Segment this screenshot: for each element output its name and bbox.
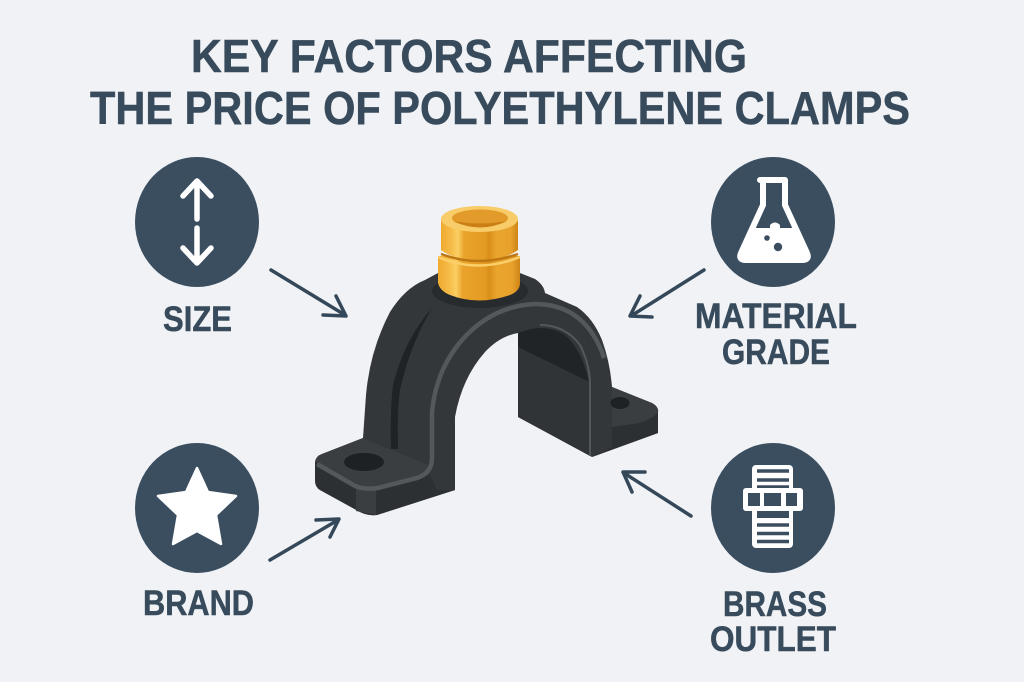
icon: size arrows — [135, 157, 259, 287]
brass outlet — [438, 206, 520, 300]
arrow: brass to clamp — [623, 472, 691, 516]
arrow: brand to clamp — [270, 519, 339, 560]
inner arch rim — [540, 325, 590, 456]
seat shadow — [432, 274, 528, 308]
icon: star — [135, 443, 259, 573]
clamp illustration — [315, 206, 658, 515]
label: brass outlet: OUTLET — [710, 620, 836, 659]
inner arch shadow — [518, 328, 589, 382]
arrow: material to clamp — [630, 270, 704, 317]
inner wall — [518, 347, 592, 457]
clamp body — [315, 273, 658, 515]
right foot side — [592, 412, 658, 457]
label: brass outlet: BRASS — [723, 585, 827, 624]
icon: flask — [711, 157, 835, 287]
arrow: size to clamp — [271, 270, 346, 316]
label: material grade: MATERIAL — [695, 297, 857, 336]
label: material grade — [695, 297, 857, 372]
label: material grade: GRADE — [722, 333, 830, 372]
groove — [391, 308, 432, 449]
icon: brass outlet — [711, 443, 835, 573]
title — [90, 30, 910, 134]
right foot top — [612, 387, 658, 427]
label: size: SIZE — [163, 300, 232, 339]
left foot top — [315, 438, 430, 489]
title: THE PRICE OF POLYETHYLENE CLAMPS — [90, 82, 910, 134]
label: brass outlet — [710, 585, 836, 659]
front rib highlight — [317, 304, 604, 489]
label: brand: BRAND — [143, 584, 254, 623]
title: KEY FACTORS AFFECTING — [191, 30, 747, 82]
left foot side — [315, 462, 455, 515]
